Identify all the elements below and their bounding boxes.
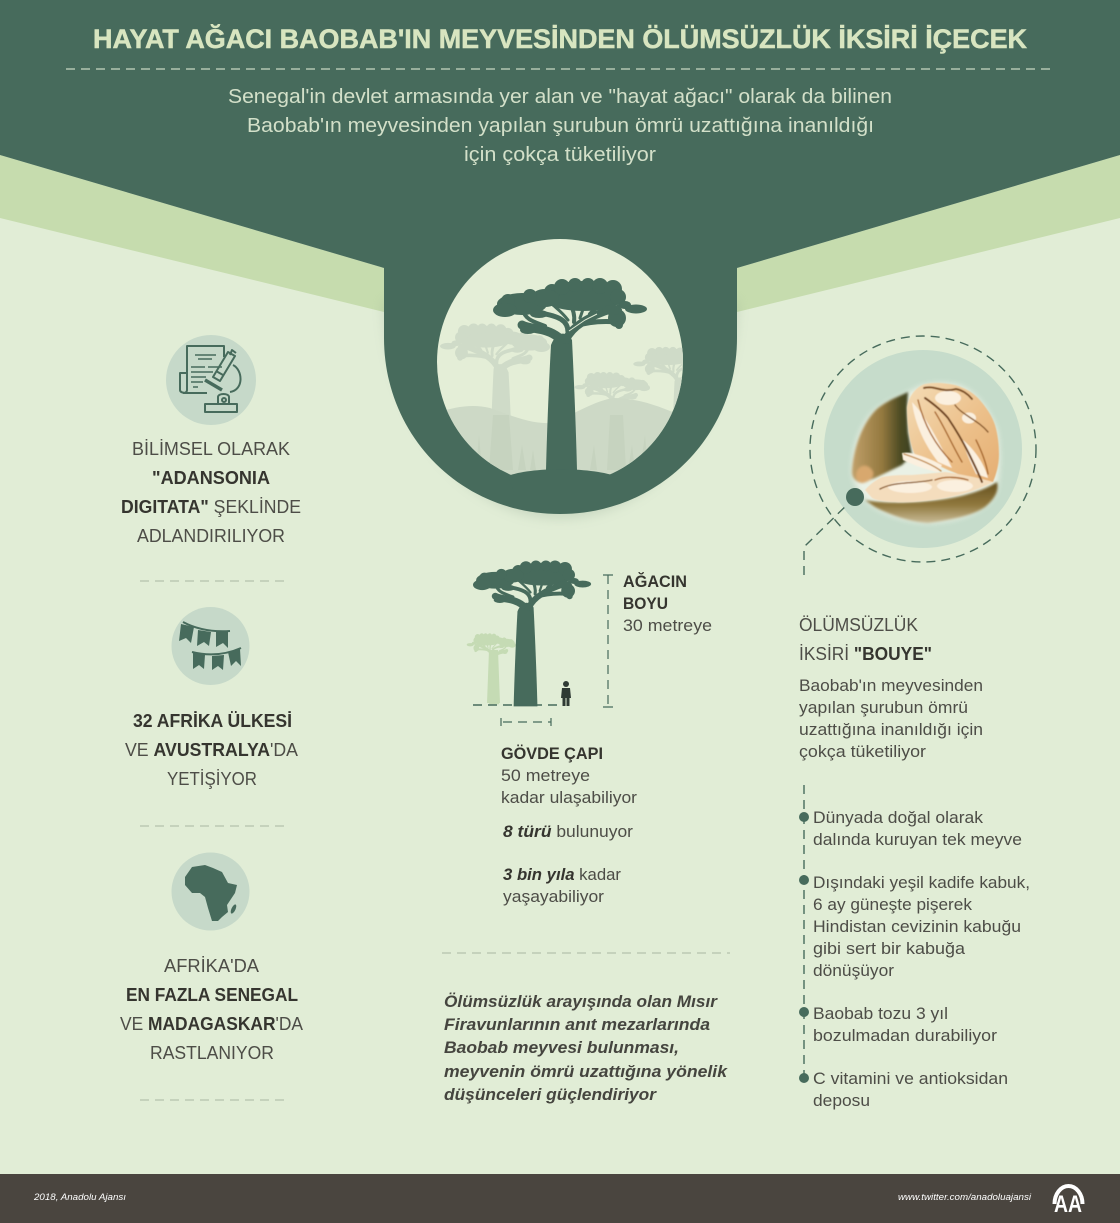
left text 1: BİLİMSEL OLARAK — [132, 439, 290, 459]
pharaoh paragraph: Firavunlarının anıt mezarlarında — [444, 1016, 710, 1034]
subtitle: için çokça tüketiliyor — [464, 144, 656, 166]
bullet list: Dışındaki yeşil kadife kabuk, — [813, 874, 1030, 892]
bullet list: bozulmadan durabiliyor — [813, 1027, 998, 1045]
left text 3 — [120, 956, 303, 1063]
left text 1: "ADANSONIA — [152, 468, 270, 488]
left text 3: EN FAZLA SENEGAL — [126, 985, 298, 1005]
left text 3: VE MADAGASKAR'DA — [120, 1014, 303, 1034]
left text 1 — [121, 439, 301, 546]
left text 2: YETİŞİYOR — [167, 769, 257, 789]
pharaoh paragraph: düşünceleri güçlendiriyor — [444, 1086, 658, 1104]
subtitle: Baobab'ın meyvesinden yapılan şurubun ömrü uzattığına inanıldığı — [247, 115, 874, 137]
bullet list: dalında kuruyan tek meyve — [813, 831, 1022, 849]
light green band — [0, 155, 1120, 312]
bullet list: Dünyada doğal olarak — [813, 809, 984, 827]
left text 3: AFRİKA'DA — [164, 956, 259, 976]
left text 2: 32 AFRİKA ÜLKESİ — [133, 711, 292, 731]
trunk diameter label: kadar ulaşabiliyor — [501, 789, 638, 807]
background trees — [440, 324, 683, 416]
species and age facts — [503, 823, 634, 906]
species and age facts: 8 türü bulunuyor — [503, 823, 634, 841]
tree height label: BOYU — [623, 595, 668, 613]
bullet list: 6 ay güneşte pişerek — [813, 896, 973, 914]
footer — [0, 1174, 1120, 1223]
tree height label: 30 metreye — [623, 617, 712, 635]
bullet list: gibi sert bir kabuğa — [813, 940, 966, 958]
bouye heading: İKSİRİ "BOUYE" — [799, 644, 932, 664]
title: HAYAT AĞACI BAOBAB'IN MEYVESİNDEN ÖLÜMSÜZLÜK İKSİRİ İÇECEK — [93, 23, 1027, 54]
pharaoh paragraph — [444, 992, 728, 1104]
fruit illustration — [810, 336, 1036, 562]
left icon: bunting — [172, 607, 250, 685]
left text 1: DIGITATA" ŞEKLİNDE — [121, 497, 301, 517]
tree height label: AĞACIN — [623, 572, 687, 591]
tree size diagram — [467, 560, 613, 726]
header banner — [0, 0, 1120, 518]
pharaoh paragraph: meyvenin ömrü uzattığına yönelik — [444, 1063, 728, 1081]
footer: www.twitter.com/anadoluajansi — [898, 1192, 1032, 1202]
trunk diameter label — [501, 744, 638, 807]
left text 2 — [125, 711, 298, 789]
bouye description: çokça tüketiliyor — [799, 743, 927, 761]
baobab scene in circle — [437, 239, 683, 475]
left icon: Africa map — [172, 852, 250, 930]
subtitle: Senegal'in devlet armasında yer alan ve "hayat ağacı" olarak da bilinen — [228, 86, 892, 108]
trunk diameter label: 50 metreye — [501, 767, 590, 785]
main tree — [493, 278, 647, 470]
pharaoh paragraph: Ölümsüzlük arayışında olan Mısır — [444, 992, 719, 1011]
species and age facts: 3 bin yıla kadar — [503, 866, 622, 884]
logo: AA: AA — [1054, 1191, 1082, 1218]
bullet list: Baobab tozu 3 yıl — [813, 1005, 948, 1023]
species and age facts: yaşayabiliyor — [503, 888, 605, 906]
bullet list: dönüşüyor — [813, 962, 895, 980]
trunk diameter label: GÖVDE ÇAPI — [501, 744, 603, 763]
bouye description: uzattığına inanıldığı için — [799, 721, 983, 739]
bullet list: deposu — [813, 1092, 870, 1110]
person — [561, 681, 571, 706]
bouye description: yapılan şurubun ömrü — [799, 699, 968, 717]
bouye heading: ÖLÜMSÜZLÜK — [799, 615, 918, 635]
connector from fruit to label — [804, 488, 864, 578]
bouye description — [799, 677, 983, 761]
nut halo — [852, 383, 1000, 523]
pharaoh paragraph: Baobab meyvesi bulunması, — [444, 1039, 679, 1057]
left icon: microscope — [166, 335, 256, 425]
left text 3: RASTLANIYOR — [150, 1043, 274, 1063]
bullet list: Hindistan cevizinin kabuğu — [813, 918, 1021, 936]
bullet list: C vitamini ve antioksidan — [813, 1070, 1008, 1088]
tree height label — [623, 572, 712, 635]
bouye description: Baobab'ın meyvesinden — [799, 677, 983, 695]
bullet list — [799, 785, 1030, 1110]
fruit flesh details — [888, 391, 988, 493]
left text 1: ADLANDIRILIYOR — [137, 526, 285, 546]
subtitle — [228, 86, 892, 166]
footer: 2018, Anadolu Ajansı — [33, 1192, 127, 1202]
bouye heading — [799, 615, 932, 664]
left text 2: VE AVUSTRALYA'DA — [125, 740, 298, 760]
